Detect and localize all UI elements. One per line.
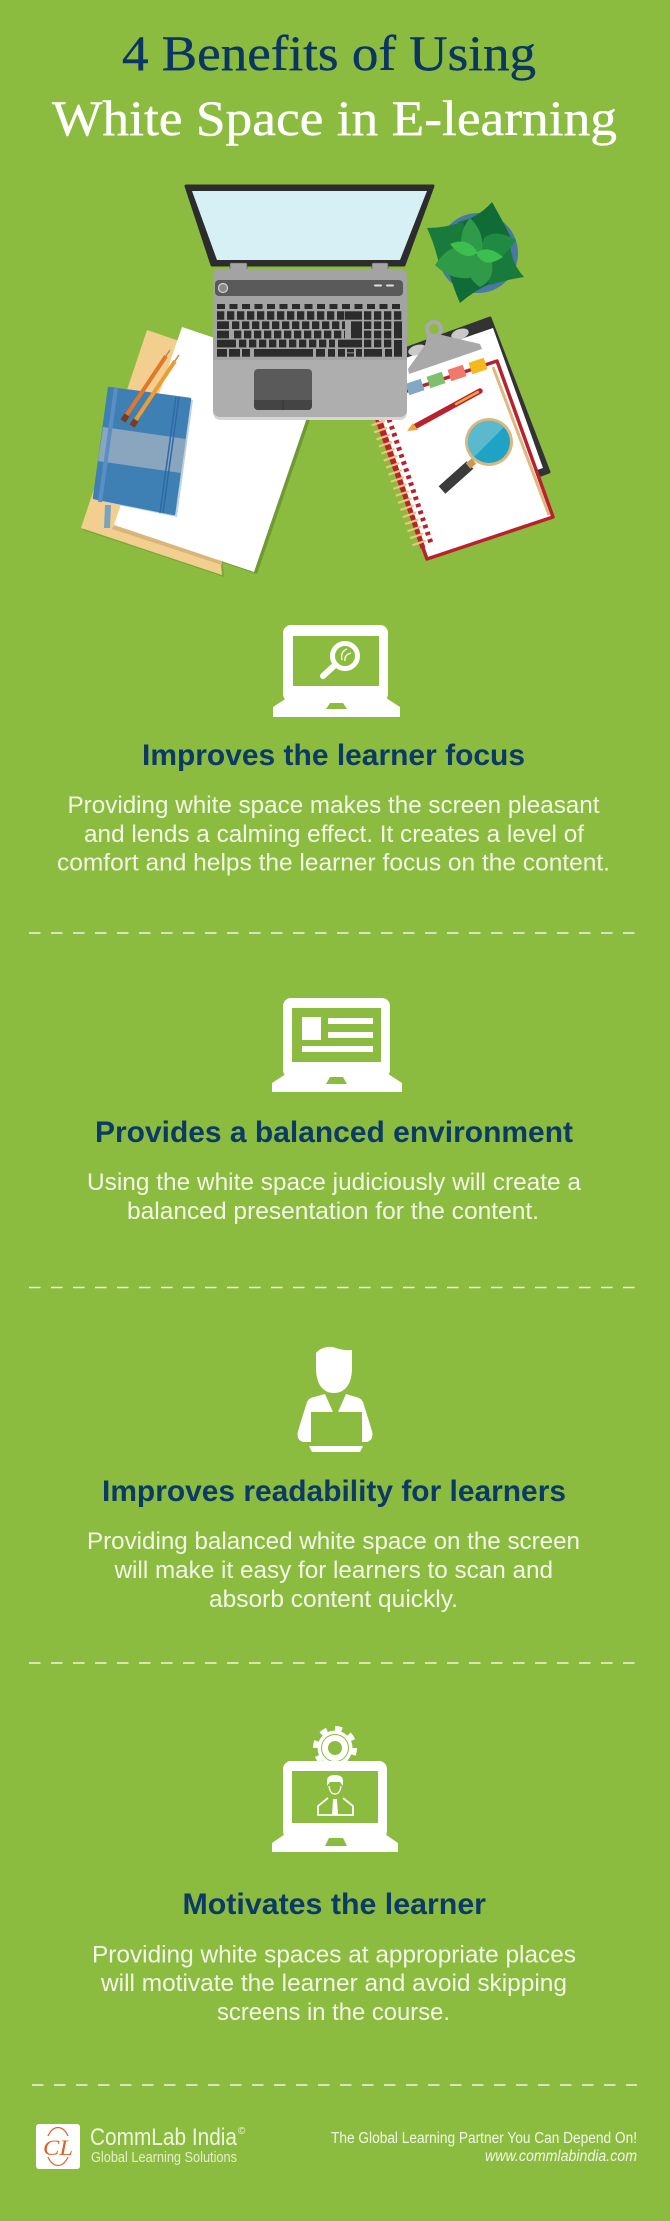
body text — [87, 1528, 580, 1613]
body text — [87, 1169, 582, 1225]
section 1: improves the learner focus — [57, 625, 610, 876]
body text: will motivate the learner and avoid skipping — [100, 1970, 567, 1997]
pen — [407, 391, 480, 431]
heading: Motivates the learner — [182, 1888, 486, 1921]
body text — [92, 1942, 576, 2026]
body text: Using the white space judiciously will create a — [87, 1169, 582, 1196]
body text: balanced presentation for the content. — [127, 1198, 539, 1225]
red spiral notebook — [371, 358, 553, 559]
body text: absorb content quickly. — [209, 1586, 458, 1613]
tabs — [406, 358, 487, 395]
body text: Providing white spaces at appropriate places — [92, 1942, 576, 1968]
logo: © — [238, 2126, 246, 2137]
plant — [427, 202, 524, 303]
logo: Global Learning Solutions — [91, 2149, 237, 2166]
body text: comfort and helps the learner focus on the content. — [57, 850, 610, 876]
tagline: The Global Learning Partner You Can Depend On! — [331, 2130, 637, 2147]
body text: and lends a calming effect. It creates a level of — [84, 821, 584, 848]
website: www.commlabindia.com — [485, 2148, 637, 2165]
hero illustration: desk with laptop — [81, 186, 553, 577]
heading: Provides a balanced environment — [95, 1116, 573, 1149]
logo: CommLab India — [90, 2124, 238, 2151]
section 4: motivates the learner — [92, 1728, 576, 2026]
clipboard — [380, 318, 549, 505]
body text: Providing white space makes the screen pleasant — [68, 792, 600, 819]
icon: person with laptop — [298, 1347, 372, 1452]
laptop — [186, 186, 433, 420]
clip — [408, 322, 482, 374]
keyboard — [217, 306, 402, 357]
folder — [81, 330, 224, 577]
pencils — [123, 350, 179, 426]
logo — [36, 2124, 246, 2169]
title — [52, 25, 617, 146]
magnifying glass — [442, 418, 513, 490]
footer — [36, 2124, 637, 2169]
laptop screen — [186, 186, 433, 265]
icon: laptop with magnifier — [273, 625, 400, 717]
heading: Improves readability for learners — [102, 1475, 566, 1508]
title: 4 Benefits of Using — [122, 25, 536, 81]
touchpad — [254, 369, 312, 410]
title: White Space in E-learning — [52, 90, 617, 146]
icon: laptop with gear and person — [272, 1728, 398, 1852]
section 2: provides a balanced environment — [87, 998, 582, 1225]
section 3: improves readability for learners — [87, 1347, 580, 1613]
body text: will make it easy for learners to scan and — [113, 1557, 553, 1584]
body text: screens in the course. — [217, 1999, 450, 2026]
heading: Improves the learner focus — [142, 739, 525, 772]
body text: Providing balanced white space on the screen — [87, 1528, 580, 1555]
logo: CL — [43, 2135, 73, 2160]
blue notebook — [94, 388, 193, 528]
white paper sheet — [112, 327, 325, 574]
icon: laptop with content layout — [272, 998, 402, 1092]
body text — [57, 792, 610, 876]
